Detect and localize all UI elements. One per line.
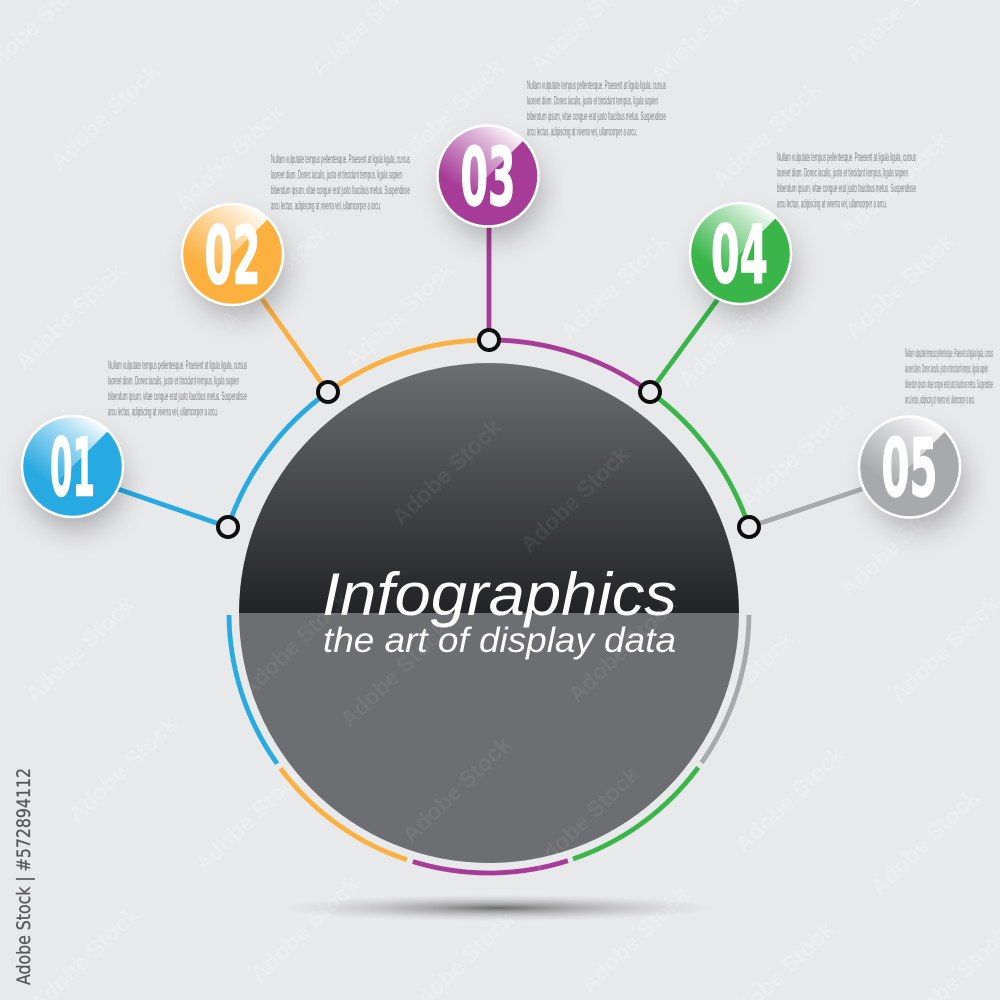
text: Nullam vulputate tempus pellentesque. Praesent at ligula ligula, cursus (527, 78, 666, 92)
central circle (239, 363, 739, 863)
circle upper half (239, 363, 739, 613)
watermark pattern: Adobe Stock (45, 58, 164, 174)
badge 03 (438, 126, 541, 238)
text: arcu lectus, adipiscing at viverra vel, ullamcorper a arcu. (271, 198, 381, 212)
badge 01 (22, 416, 123, 528)
watermark pattern: Adobe Stock (63, 711, 182, 827)
title: Infographics (322, 561, 677, 628)
watermark pattern: Adobe Stock (555, 228, 674, 344)
watermark pattern: Adobe Stock (707, 76, 826, 192)
watermark pattern: Adobe Stock (680, 626, 799, 742)
watermark over central circle: Adobe Stock (397, 731, 516, 847)
watermark pattern: Adobe Stock (245, 871, 364, 987)
watermark pattern: Adobe Stock (20, 591, 139, 707)
node 01 (218, 517, 238, 537)
number 02: 02 (204, 210, 260, 302)
watermark pattern: Adobe Stock (170, 99, 289, 215)
watermark pattern: Adobe Stock (190, 761, 309, 877)
badge 04 (690, 203, 794, 316)
connector 05 (749, 489, 862, 527)
watermark over central circle: Adobe Stock (387, 414, 506, 530)
circle lower half (239, 613, 739, 863)
watermark over central circle: Adobe Stock (525, 761, 644, 877)
badge 05 (859, 416, 964, 529)
watermark pattern: Adobe Stock (215, 218, 334, 334)
stock id label: Adobe Stock | #572894112 (13, 768, 35, 985)
text: laoreet diam. Donec iaculis, justo et tincidunt tempus, ligula sapien (527, 94, 658, 108)
text: Nullam vulputate tempus pellentesque. Praesent at ligula ligula, cursus (108, 358, 247, 372)
connector 02 (262, 299, 328, 392)
node rings (218, 330, 759, 537)
watermark pattern: Adobe Stock (575, 881, 694, 997)
badge 02 (182, 204, 286, 316)
watermark over central circle: Adobe Stock (563, 591, 682, 707)
arc: orange (328, 340, 489, 392)
node 02 (318, 382, 338, 402)
arc: green (650, 392, 749, 527)
text block 01 (108, 358, 247, 418)
watermark pattern: Adobe Stock (865, 784, 984, 900)
connector 03 (487, 226, 491, 340)
watermark pattern: Adobe Stock (835, 486, 954, 602)
badge 03: 03 (460, 131, 516, 224)
text: Nullam vulputate tempus pellentesque. Praesent at ligula ligula, cursus (271, 152, 410, 166)
text: arcu lectus, adipiscing at viverra vel, ullamcorper a arcu. (527, 124, 637, 138)
segment: blue (229, 615, 277, 764)
watermark over central circle (235, 414, 682, 877)
watermark over central circle: Adobe Stock (335, 616, 454, 732)
text block 04 (777, 150, 916, 210)
ground shadow (283, 895, 713, 921)
lower ring segments (229, 615, 749, 873)
segment: green (573, 767, 698, 859)
upper ring arcs (228, 340, 749, 527)
text block 05 (905, 346, 993, 406)
watermark pattern: Adobe Stock (10, 258, 129, 374)
connector 04 (650, 299, 718, 392)
text: bibendum ipsum, vitae congue erat justo faucibus metus. Suspendisse (108, 389, 247, 403)
segment: purple (413, 861, 568, 873)
text: bibendum ipsum, vitae congue erat justo faucibus metus. Suspendisse (271, 183, 410, 197)
arc: blue (228, 392, 328, 527)
text: laoreet diam. Donec iaculis, justo et tincidunt tempus, ligula sapien (108, 374, 239, 388)
badge 01: 01 (50, 422, 95, 514)
segment: orange (280, 768, 407, 860)
watermark over central circle: Adobe Stock (235, 586, 354, 702)
text: laoreet diam. Donec iaculis, justo et tincidunt tempus, ligula sapien (271, 168, 402, 182)
watermark pattern: Adobe Stock (840, 228, 959, 344)
connector lines (118, 226, 862, 527)
watermark pattern: Adobe Stock (673, 276, 792, 392)
text: bibendum ipsum, vitae congue erat justo faucibus metus. Suspendisse (527, 109, 666, 123)
number 05: 05 (882, 422, 938, 515)
text block 03 (527, 78, 666, 138)
node 05 (739, 517, 759, 537)
node 03 (479, 330, 499, 350)
node 04 (640, 382, 660, 402)
text: arcu lectus, adipiscing at viverra vel, ullamcorper a arcu. (108, 404, 218, 418)
connector 01 (118, 489, 228, 527)
watermark pattern: Adobe Stock (730, 741, 849, 857)
watermark pattern: Adobe Stock (735, 398, 854, 514)
watermark pattern: Adobe Stock (340, 256, 459, 372)
arc: purple (489, 340, 650, 392)
segment: gray (702, 615, 749, 763)
number 04: 04 (711, 208, 768, 302)
text block 02 (271, 152, 410, 212)
watermark over central circle: Adobe Stock (515, 441, 634, 557)
subtitle: the art of display data (323, 621, 676, 660)
watermark pattern: Adobe Stock (390, 54, 509, 170)
watermark pattern: Adobe Stock (835, 126, 954, 242)
